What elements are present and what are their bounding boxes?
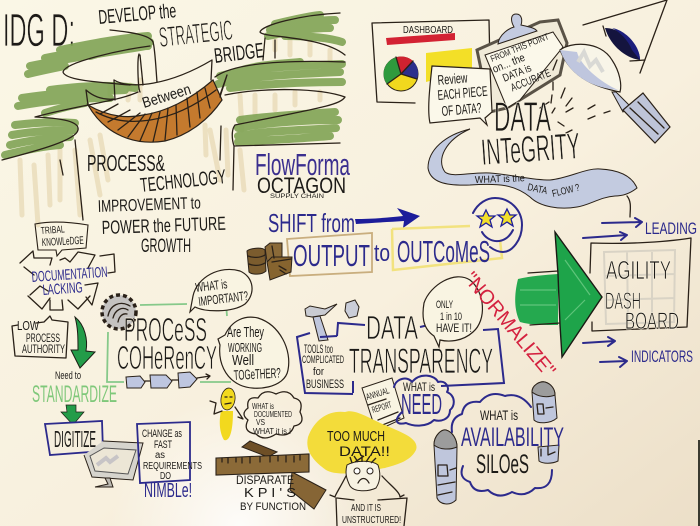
dashes: light rays: [540, 60, 610, 133]
text: process and technology improvement: IMPROVEMENT to: [97, 193, 201, 216]
arrow: small green down: [61, 405, 84, 425]
speech bubble: only 1 in 10 have it: [423, 277, 482, 347]
text: process and technology improvement: GROWTH: [141, 236, 191, 257]
speech bubble: what is important: IMPORTANT?: [198, 288, 249, 309]
change fast box: CHANGE as: [142, 428, 182, 440]
documentation lacking with arrows: [20, 251, 115, 310]
thought cloud: documented vs: WHAT is: [252, 402, 274, 411]
too much data yellow blob: TOO MUCH: [327, 428, 385, 445]
change fast box: [137, 422, 202, 483]
note text: ACCURATE: [509, 67, 553, 94]
speech bubble: review each piece of data: EACH PIECE: [437, 83, 488, 103]
change fast box: as: [155, 450, 165, 461]
disparate KPIs text: DISPARATE: [236, 473, 294, 487]
too much data yellow blob: DATA!!: [339, 443, 390, 459]
shift from output to outcomes: [268, 198, 522, 276]
faint table grid: [604, 250, 675, 324]
heading text: develop the strategic bridge: BRIDGE: [213, 39, 265, 68]
agility dashboard box: DASH: [605, 288, 641, 315]
heading text: develop the strategic bridge: Between: [140, 81, 193, 112]
speech bubble: are they working well together: [218, 317, 289, 388]
note text: on... the: [491, 52, 527, 76]
speech bubble: review each piece of data: OF DATA?: [441, 100, 482, 119]
low process authority box: LOW: [17, 318, 40, 333]
digitize box: [45, 421, 103, 455]
output box: [287, 233, 372, 276]
documentation lacking with arrows: DOCUMENTATION: [31, 264, 108, 286]
thought cloud: documented vs: DOCUMENTED: [254, 410, 292, 419]
note text: FROM THIS POINT: [489, 31, 551, 64]
process coherency block: [102, 295, 231, 388]
smiley with star eyes: [473, 198, 522, 252]
big green arrow: [515, 232, 602, 357]
documentation lacking with arrows: LACKING: [42, 279, 83, 299]
heading text: develop the strategic bridge: [98, 0, 265, 112]
data flow river: FLOW ?: [551, 182, 581, 200]
title: IDG D:: [3, 4, 75, 56]
low process authority box: [12, 316, 68, 358]
heading: data integrity: DATA: [494, 93, 551, 140]
tools text: COMPLICATED: [302, 354, 344, 366]
normalize label: "NORMALIZE": [459, 268, 560, 382]
icon: cardboard boxes: [247, 243, 292, 280]
text: process and technology improvement: TECHNOLOGY: [139, 166, 227, 197]
leading arrows and label: [583, 218, 697, 240]
speech bubble: only 1 in 10 have it: HAVE IT!: [436, 321, 472, 335]
clip: [498, 14, 537, 44]
red bar: [386, 33, 455, 45]
logo: FlowForma Octagon Supply Chain: FlowForma: [255, 147, 350, 182]
cloud: what is need: [394, 376, 454, 426]
silo right: [532, 382, 559, 463]
outcomes box: [392, 226, 502, 270]
process chevrons: [126, 372, 210, 388]
speech bubble: review each piece of data: [429, 66, 492, 125]
cloud: what is need: NEED: [401, 389, 442, 421]
cloud: what is availability silos: [452, 394, 564, 496]
cloud: what is availability silos: WHAT is: [480, 407, 518, 423]
shift from output to outcomes: OUTCoMeS: [397, 234, 490, 269]
tools text: [302, 342, 344, 391]
tools text: for: [313, 366, 324, 378]
bridge planks: [96, 88, 216, 142]
cloud: what is availability silos: SILOeS: [476, 449, 529, 479]
agility dashboard box: [590, 238, 691, 335]
label: WHAT is the: [475, 173, 525, 186]
thought cloud: documented vs: VS: [256, 418, 265, 427]
text: process and technology improvement: PROCESS&: [87, 150, 165, 176]
bridge ropes and posts: [86, 60, 227, 105]
change fast box: FAST: [154, 439, 172, 451]
heading: data integrity: INTeGRITY: [480, 125, 581, 173]
data transparency block: TRANSPARENCY: [349, 342, 493, 381]
arrow: [355, 208, 420, 228]
yellow rectangle: [426, 48, 472, 82]
icon: hammer: [305, 304, 337, 341]
digitize box: DIGITIZE: [54, 426, 96, 452]
speech bubble: are they working well together: TOGeTHER?: [233, 365, 281, 383]
speech bubble: only 1 in 10 have it: 1 in 10: [440, 311, 462, 323]
too much data yellow blob: [307, 411, 417, 473]
icon: gear: [102, 295, 136, 329]
tribal knowledge callout: KNOWLeDGE: [42, 235, 84, 249]
annual report paper: [362, 378, 404, 431]
cloud: what is availability silos: AVAILABILITY: [461, 422, 564, 452]
need to standardize: Need to: [55, 370, 81, 382]
icon: monitor: [84, 441, 143, 487]
person thinking: [210, 387, 243, 440]
data flow river: [428, 129, 637, 217]
annual report paper: ANNUAL: [365, 385, 391, 402]
tools text: TOOLS too: [304, 342, 333, 356]
blue frame: [297, 323, 504, 394]
heading: data integrity: [480, 93, 581, 173]
data flow river: DATA: [526, 182, 548, 197]
disparate KPIs text: BY FUNCTION: [240, 501, 306, 513]
need to standardize: [32, 370, 117, 408]
logo: FlowForma Octagon Supply Chain: [255, 147, 350, 200]
low process authority box: PROCESS: [26, 331, 60, 345]
disparate KPIs text: [236, 473, 306, 513]
data transparency block: DATA: [366, 309, 418, 346]
icon: nut: [345, 300, 359, 318]
overwhelmed character: [330, 455, 404, 497]
thought cloud: documented vs: [244, 392, 302, 438]
magnifying glass: [540, 44, 670, 143]
dashboard sketch: [372, 20, 490, 103]
speech bubble: are they working well together: Well: [232, 352, 254, 369]
low process authority box: AUTHORITY: [22, 342, 65, 356]
logo: FlowForma Octagon Supply Chain: SUPPLY CHAIN: [270, 194, 324, 200]
logo: FlowForma Octagon Supply Chain: OCTAGON: [257, 173, 346, 198]
disparate KPIs text: K P I ' S: [244, 485, 296, 500]
note text: DATA is: [501, 62, 534, 85]
tools text: BUSINESS: [306, 377, 344, 391]
note text: [487, 31, 564, 98]
sign: and it is unstructured: AND IT IS: [351, 503, 381, 514]
speech bubble: are they working well together: Are They: [227, 324, 264, 341]
annual report paper: REPORT: [371, 399, 393, 415]
need to standardize: STANDARDIZE: [32, 381, 117, 408]
tribal knowledge callout: [35, 222, 88, 256]
cloud: what is need: WHAT is: [403, 380, 435, 394]
right cliffs: [205, 13, 345, 190]
speech bubble: what is important: WHAT is: [195, 276, 228, 295]
process coherency block: COHeRenCY: [117, 339, 217, 376]
bridge deck: [88, 80, 222, 142]
pie chart: [384, 57, 418, 91]
strategic bridge illustration: [2, 13, 345, 225]
speech bubble: only 1 in 10 have it: ONLY: [436, 299, 453, 311]
change fast box: REQUIREMENTS: [143, 461, 202, 472]
indicators arrows and label: [583, 337, 693, 367]
sign: and it is unstructured: [336, 498, 407, 526]
change fast box: DO: [160, 471, 171, 482]
text: process and technology improvement: POWER the FUTURE: [101, 214, 226, 239]
planks: disparate kpis: [216, 441, 326, 509]
heading text: develop the strategic bridge: STRATEGIC: [157, 14, 234, 53]
data transparency block: [297, 309, 504, 394]
speech bubble: review each piece of data: Review: [437, 69, 469, 88]
text: process and technology improvement: [87, 150, 227, 257]
shift from output to outcomes: to: [374, 240, 390, 267]
silo left: [434, 430, 457, 504]
arrow: green curved down: [71, 317, 95, 368]
eye sketch: [583, 0, 667, 73]
clipboard: [477, 14, 567, 112]
process coherency block: PROCeSS: [124, 311, 207, 348]
sign: and it is unstructured: UNSTRUCTURED!: [342, 515, 401, 526]
shift from output to outcomes: SHIFT from: [268, 208, 355, 238]
thought cloud: documented vs: WHAT it is !: [253, 427, 291, 436]
dashboard sketch: DASHBOARD: [403, 25, 453, 36]
speech bubble: are they working well together: WORKING: [228, 340, 262, 355]
nimble: NIMBLe!: [144, 480, 192, 502]
shift from output to outcomes: OUTPUT: [293, 238, 370, 273]
speech bubble: what is important: [190, 269, 252, 312]
left cliffs: [2, 30, 157, 225]
green box: [107, 304, 231, 382]
tribal knowledge callout: TRIBAL: [40, 224, 65, 237]
